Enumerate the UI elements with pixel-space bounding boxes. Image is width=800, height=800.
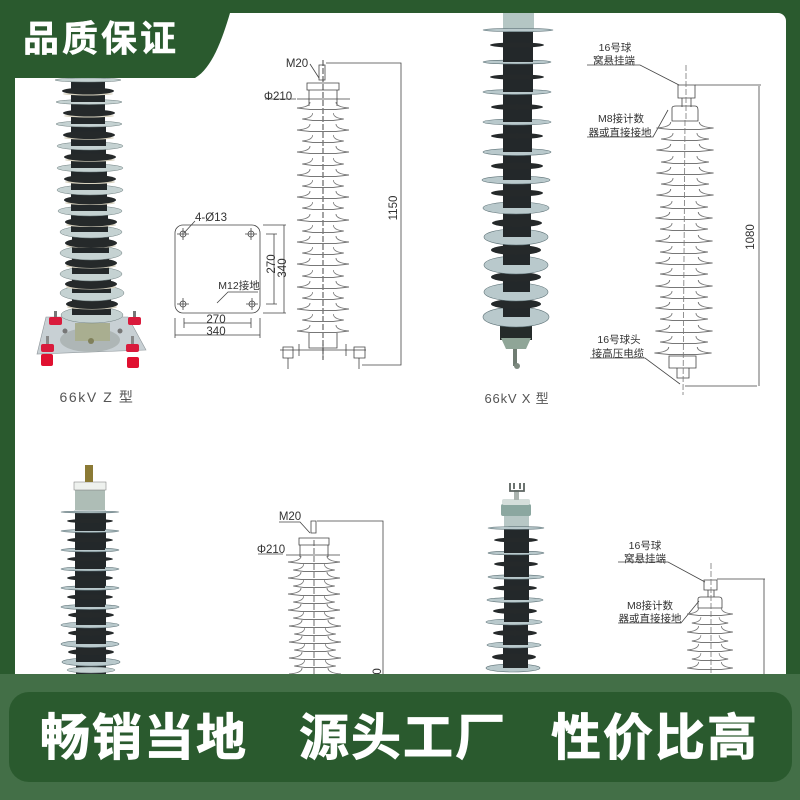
mounting plate drawing: 4-Ø13 xyxy=(195,212,227,224)
dimension labels: M20 xyxy=(286,58,308,70)
mounting plate drawing: 270 xyxy=(266,254,278,274)
mounting plate drawing: M12接地 xyxy=(218,279,260,292)
technical drawing: 66kV Z type: Φ210 xyxy=(264,91,292,103)
banner text: value: 性价比高 xyxy=(551,710,759,766)
mounting plate drawing: 340 xyxy=(206,326,226,338)
photo: bottom left arrester xyxy=(61,465,120,677)
photo: 66kV Z type arrester xyxy=(37,78,146,368)
technical drawing: 66kV X type: 窝悬挂端 xyxy=(593,54,635,67)
mounting plate drawing xyxy=(175,212,289,338)
technical drawing: bottom middle xyxy=(257,511,384,693)
technical drawing: bottom right: 窝悬挂端 xyxy=(624,552,666,565)
technical drawing: bottom right xyxy=(618,539,765,680)
banner text: sells locally: 畅销当地 xyxy=(40,710,248,766)
photo: bottom right arrester xyxy=(486,483,544,672)
mounting plate drawing: 340 xyxy=(277,258,289,278)
technical drawing: 66kV X type: 16号球 xyxy=(599,41,632,54)
bottom banner xyxy=(0,674,800,800)
technical drawing: 66kV Z type xyxy=(264,58,401,369)
technical drawing: 66kV X type: M8接计数 xyxy=(598,112,645,125)
technical drawing: 66kV X type: 器或直接接地 xyxy=(588,126,652,139)
technical drawing: bottom middle: Φ210 xyxy=(257,544,285,556)
technical drawing: 66kV X type: 接高压电缆 xyxy=(592,347,645,360)
technical drawing: 66kV X type: 1080 xyxy=(745,224,757,250)
technical drawing: 66kV Z type: 1150 xyxy=(388,196,400,220)
base plate xyxy=(37,311,146,368)
bottom fitting xyxy=(500,326,532,369)
technical drawing: bottom right: M8接计数 xyxy=(627,599,674,612)
technical drawing: bottom right: 器或直接接地 xyxy=(618,612,682,625)
technical drawing: bottom middle: 1150 xyxy=(372,668,384,693)
banner text: factory direct: 源头工厂 xyxy=(299,710,507,766)
technical drawing: bottom right: 16号球 xyxy=(629,539,662,552)
mounting plate drawing: 270 xyxy=(206,314,226,326)
technical drawing: 66kV X type: 16号球头 xyxy=(597,333,641,346)
photo: 66kV X type arrester xyxy=(482,13,553,369)
badge title: 品质保证 xyxy=(23,18,179,59)
caption: 66kV X type: 66kV X 型 xyxy=(485,391,549,406)
caption: 66kV Z type: 66kV Z 型 xyxy=(59,389,135,405)
banner inner panel xyxy=(9,692,792,782)
top-left badge xyxy=(0,0,230,78)
technical drawing: bottom middle: M20 xyxy=(279,511,301,523)
technical drawing: 66kV X type xyxy=(587,41,761,395)
